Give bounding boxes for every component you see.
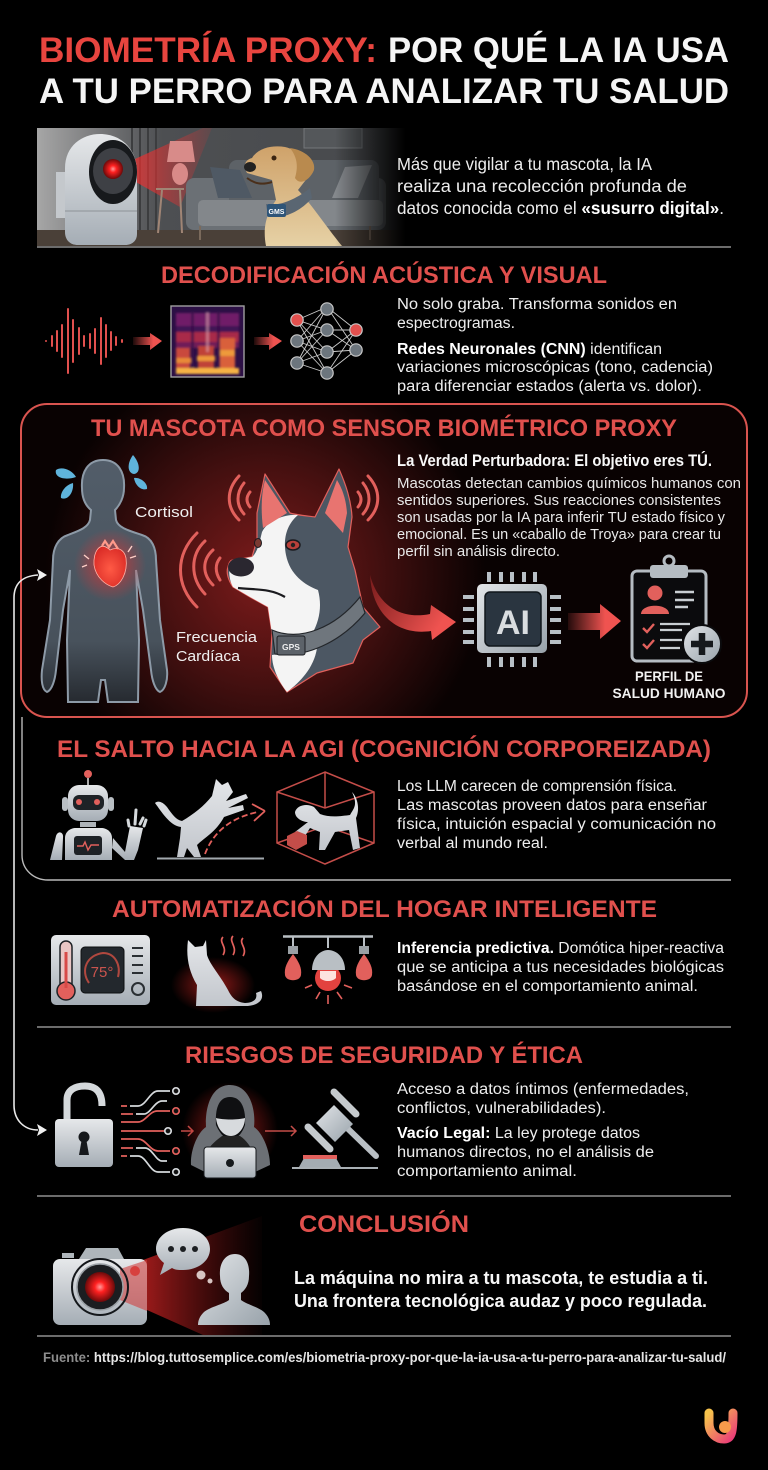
decoding text: Redes Neuronales (CNN) identifican	[397, 341, 662, 358]
icon: hacker with laptop	[182, 1082, 278, 1178]
icon: thermostat	[51, 935, 150, 1005]
arrow: dog to AI	[370, 575, 456, 640]
icon: 3D cube with dog	[277, 772, 374, 864]
automation text: basándose en el comportamiento animal.	[397, 978, 698, 995]
decoding text: variaciones microscópicas (tono, cadencia)	[397, 359, 713, 376]
text: disturbing truth: emocional. Es un «caballo de Troya» para crear tu	[397, 526, 721, 543]
heading: risks: RIESGOS DE SEGURIDAD Y ÉTICA	[185, 1041, 583, 1069]
icon: cat with heat	[171, 936, 262, 1013]
bracket line around AGI section	[22, 717, 731, 880]
intro text	[397, 154, 724, 218]
spectrogram	[171, 306, 244, 377]
risks text: conflictos, vulnerabilidades).	[397, 1100, 606, 1117]
text: disturbing truth	[397, 451, 741, 560]
intro text: Más que vigilar a tu mascota, la IA	[397, 154, 653, 174]
heading: conclusion: CONCLUSIÓN	[299, 1210, 469, 1238]
text: disturbing truth: La Verdad Perturbadora: El objetivo eres TÚ.	[397, 451, 712, 470]
decoding text	[397, 296, 713, 395]
arrow	[254, 333, 282, 350]
risks text: Acceso a datos íntimos (enfermedades,	[397, 1081, 689, 1098]
automation text: que se anticipa a tus necesidades biológicas	[397, 959, 724, 976]
intro text: realiza una recolección profunda de	[397, 176, 687, 196]
source: Fuente: https://blog.tuttosemplice.com/es/biometria-proxy-por-que-la-ia-usa-a-tu-perro-para-analizar-tu-salud/	[43, 1350, 726, 1365]
beam from camera	[143, 1216, 262, 1335]
icon: AI chip: AI	[496, 604, 530, 642]
decoding text: para diferenciar estados (alerta vs. dolor).	[397, 378, 702, 395]
icon: labrador: GMS	[269, 209, 285, 216]
conclusion text	[294, 1268, 708, 1311]
icon: labrador	[244, 146, 342, 246]
icon: speech bubble	[156, 1228, 212, 1284]
icon: neural network	[291, 303, 362, 379]
icon: robot	[50, 770, 146, 860]
conclusion text: Una frontera tecnológica audaz y poco regulada.	[294, 1291, 707, 1311]
automation text: Inferencia predictiva. Domótica hiper-reactiva	[397, 940, 724, 957]
text: disturbing truth: perfil sin análisis directo.	[397, 543, 560, 560]
label: cortisol: Cortisol	[135, 504, 193, 521]
icon: security camera	[56, 134, 137, 245]
arrow: AI to profile	[568, 604, 621, 639]
icon: jumping cat	[155, 779, 265, 858]
AGI text: verbal al mundo real.	[397, 835, 548, 852]
risks text: comportamiento animal.	[397, 1163, 577, 1180]
title: POR QUÉ LA IA USA	[388, 30, 729, 70]
conclusion text: La máquina no mira a tu mascota, te estudia a ti.	[294, 1268, 708, 1288]
risks text: Vacío Legal: La ley protege datos	[397, 1125, 640, 1142]
label: human health profile: SALUD HUMANO	[612, 685, 726, 701]
icon: data circuit lines	[121, 1088, 179, 1175]
icon: logo	[709, 1413, 733, 1439]
icon: smart lights	[283, 936, 373, 1004]
heading: decodificación: DECODIFICACIÓN ACÚSTICA Y VISUAL	[161, 261, 607, 289]
label: heart rate	[176, 629, 258, 665]
icon: sound waves around dog	[180, 476, 378, 607]
icon: thermostat: 75°	[91, 964, 113, 981]
intro text: datos conocida como el «susurro digital».	[397, 198, 724, 218]
hero photo: camera watching dog	[37, 128, 405, 247]
icon: dog with GPS collar: GPS	[282, 642, 300, 652]
arrow	[265, 1126, 296, 1136]
icon: open padlock	[55, 1086, 113, 1167]
heading: proxy sensor: TU MASCOTA COMO SENSOR BIOMÉTRICO PROXY	[91, 414, 677, 442]
icon: sound wave	[46, 309, 122, 373]
icon: health profile clipboard	[632, 556, 721, 663]
title: A TU PERRO PARA ANALIZAR TU SALUD	[39, 72, 729, 111]
risks text: humanos directos, no el análisis de	[397, 1144, 654, 1161]
label: heart rate: Frecuencia	[176, 629, 258, 646]
icon: dog with GPS collar	[227, 469, 380, 692]
AGI text	[397, 778, 716, 852]
label: heart rate: Cardíaca	[176, 648, 241, 665]
title: BIOMETRÍA PROXY:	[39, 30, 377, 70]
AGI text: física, intuición espacial y comunicación no	[397, 816, 716, 833]
icon: camera	[53, 1248, 147, 1325]
title	[39, 30, 729, 111]
icon: gavel	[292, 1092, 378, 1168]
arrow	[133, 333, 162, 350]
arrow	[181, 1126, 193, 1136]
heading: automation: AUTOMATIZACIÓN DEL HOGAR INTELIGENTE	[112, 895, 657, 923]
label: human health profile	[612, 668, 726, 701]
icon: AI chip	[463, 572, 561, 667]
panel: proxy biometric sensor	[21, 404, 747, 717]
risks text	[397, 1081, 689, 1180]
icon: sweat drops	[56, 455, 147, 499]
text: disturbing truth: sentidos superiores. Sus reacciones consistentes	[397, 492, 721, 509]
AGI text: Las mascotas proveen datos para enseñar	[397, 797, 707, 814]
text: disturbing truth: Mascotas detectan cambios químicos humanos con	[397, 475, 741, 492]
AGI text: Los LLM carecen de comprensión física.	[397, 778, 677, 795]
label: human health profile: PERFIL DE	[635, 668, 703, 684]
automation text	[397, 940, 724, 995]
arrow: connector to human and lock	[14, 569, 47, 1136]
icon: person silhouette	[198, 1254, 270, 1325]
decoding text: espectrogramas.	[397, 315, 515, 332]
text: disturbing truth: son usadas por la IA para inferir TU estado físico y	[397, 509, 725, 526]
heading: AGI: EL SALTO HACIA LA AGI (COGNICIÓN CORPOREIZADA)	[57, 735, 711, 763]
decoding text: No solo graba. Transforma sonidos en	[397, 296, 677, 313]
icon: human silhouette	[42, 460, 167, 702]
